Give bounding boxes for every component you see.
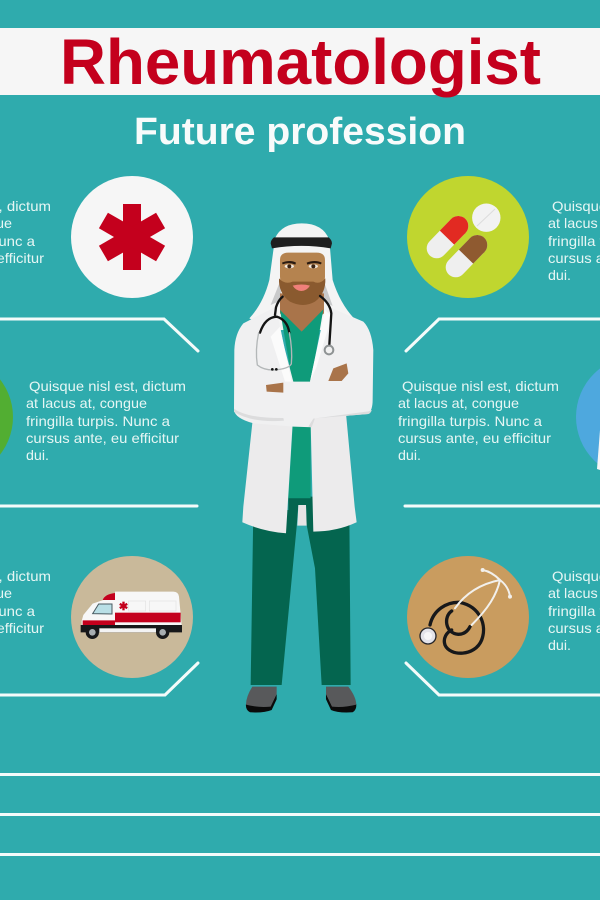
doctor figure bbox=[234, 223, 373, 713]
white coat lower bbox=[242, 413, 357, 533]
neck bbox=[280, 293, 324, 332]
text block: top right bbox=[548, 198, 600, 283]
subtitle: Future profession bbox=[134, 111, 466, 153]
text block: middle left bbox=[26, 378, 186, 463]
text block: top right: dui. bbox=[548, 267, 571, 283]
text block: middle left: cursus ante, eu efficitur bbox=[26, 430, 179, 446]
panel: middle left icon bbox=[0, 356, 13, 478]
shoes bbox=[246, 687, 356, 713]
headdress shadow bbox=[271, 282, 333, 306]
face bbox=[280, 253, 325, 304]
mouth bbox=[293, 284, 310, 291]
lapel highlight bbox=[271, 310, 332, 382]
text block: bottom right: dui. bbox=[548, 637, 571, 653]
panel: top left icon, medical star bbox=[71, 176, 193, 298]
eyes and brows bbox=[282, 261, 322, 268]
panel: bottom left icon, ambulance bbox=[71, 556, 193, 678]
text block: middle left: dui. bbox=[26, 447, 49, 463]
beard bbox=[279, 278, 325, 305]
panel: bottom right icon, stethoscope bbox=[407, 556, 529, 678]
text block: middle right: at lacus at, congue bbox=[398, 395, 519, 411]
text block: middle right: cursus ante, eu efficitur bbox=[398, 430, 551, 446]
text block: bottom right bbox=[548, 568, 600, 653]
stethoscope bbox=[256, 296, 333, 371]
text block: middle left: at lacus at, congue bbox=[26, 395, 147, 411]
title: Rheumatologist bbox=[60, 26, 541, 98]
crossed arm shading bbox=[234, 409, 372, 427]
title band bbox=[0, 26, 600, 98]
headdress bbox=[249, 223, 354, 330]
text block: top left bbox=[0, 198, 51, 266]
agal headband bbox=[271, 237, 332, 248]
trousers bbox=[251, 497, 351, 685]
text block: middle right: dui. bbox=[398, 447, 421, 463]
text block: middle right: Quisque nisl est, dictum bbox=[402, 378, 559, 394]
waist gap bbox=[297, 505, 307, 526]
text block: bottom left bbox=[0, 568, 51, 636]
text block: middle right bbox=[398, 378, 559, 463]
text block: middle right: fringilla turpis. Nunc a bbox=[398, 413, 542, 429]
panel: top right icon, pills bbox=[407, 176, 529, 298]
coat upper bbox=[234, 307, 373, 427]
text block: middle left: Quisque nisl est, dictum bbox=[29, 378, 186, 394]
panel: middle right icon bbox=[576, 356, 600, 478]
hands bbox=[266, 363, 348, 393]
text block: middle left: fringilla turpis. Nunc a bbox=[26, 413, 170, 429]
scrub shirt bbox=[280, 309, 323, 498]
